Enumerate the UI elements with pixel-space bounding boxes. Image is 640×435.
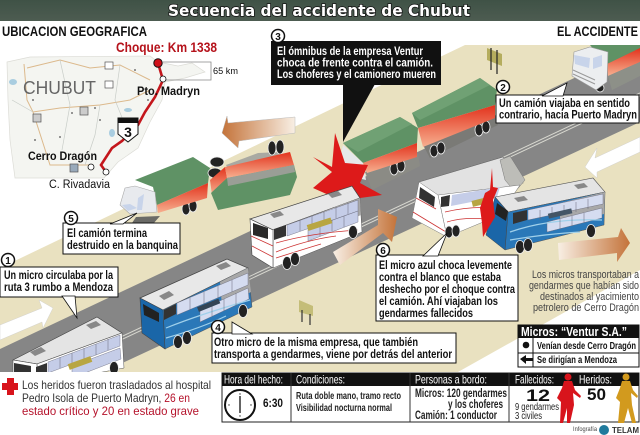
road sign upper (487, 48, 502, 74)
arrow: white left (0, 300, 53, 340)
icon: gold figure (616, 374, 638, 423)
text block: heridos: estado crítico y 20 en estado grave (22, 404, 199, 418)
callout 4: second bus: Otro micro de la misma empresa, que también (214, 337, 418, 349)
data table: Personas a bordo: (415, 372, 487, 386)
data table: Condiciones: (296, 372, 345, 386)
map label: choque: Choque: Km 1338 (116, 39, 217, 55)
map label: Cerro Dragón: Cerro Dragón (28, 151, 97, 163)
65 km bracket: 65 km (213, 66, 238, 77)
text block: heridos: Los heridos fueron trasladados al hospital (22, 378, 211, 392)
crash star between buses (480, 168, 498, 237)
scene background: beige ground (0, 45, 640, 372)
blue bus lower (140, 259, 252, 349)
white bus centre (250, 186, 362, 270)
arrow: white top right (585, 137, 640, 178)
city marker: Cerro Dragón (88, 164, 94, 170)
crash marker (154, 59, 162, 67)
callout 3: head-on collision: El ómnibus de la empresa Ventur (277, 46, 423, 58)
callout 5: destroyed truck: El camión termina (67, 228, 147, 240)
route 3 shield (118, 118, 138, 142)
credit: Infografía Telam: Infografía (573, 426, 597, 433)
data table: 6:30 (263, 398, 283, 410)
white bus crashed (412, 156, 525, 238)
arrow: right orange (558, 228, 630, 262)
callout 5: destroyed truck: 5 (68, 214, 74, 225)
collision star (313, 133, 382, 200)
city marker: Puerto Madryn (160, 76, 166, 82)
callout 1: first bus (0, 254, 118, 318)
data table: 12 (526, 386, 550, 405)
white bus lower left (13, 317, 124, 380)
text block: heridos (22, 378, 211, 418)
map label: C. Rivadavia: C. Rivadavia (49, 179, 111, 191)
truck destroyed on the shoulder (120, 157, 210, 224)
icon: clock (225, 390, 255, 420)
callout 6: blue bus collision: deshecho por el choque contra (379, 284, 515, 296)
credit: Infografía Telam (573, 425, 639, 435)
heading: ubicacion geografica: UBICACION GEOGRAFICA (2, 23, 147, 39)
credit: Infografía Telam: TELAM (612, 426, 639, 435)
lower white band (0, 372, 640, 435)
callout 3: head-on collision: choca de frente contra el camión. (277, 58, 433, 70)
data table: 50 (587, 385, 606, 404)
city marker: Comodoro Rivadavia (103, 169, 109, 175)
title bar: Secuencia del accidente de Chubut (168, 1, 470, 20)
truck in collision: trailers and cab (340, 78, 498, 190)
data table: 9 gendarmes (515, 402, 559, 413)
text block: heridos: Pedro Isola de Puerto Madryn, 26 en (22, 391, 190, 405)
callout 3: head-on collision: 3 (275, 32, 281, 43)
callout 4: second bus: transporta a gendarmes, viene por detrás del anterior (214, 349, 452, 361)
callout 6: blue bus collision: gendarmes fallecidos (379, 308, 473, 320)
data table: Micros: 120 gendarmes (415, 386, 507, 400)
callout 3: head-on collision: Los choferes y el camionero mueren (277, 69, 436, 81)
callout 1: first bus: Un micro circulaba por la (4, 270, 113, 282)
map: Chubut province (7, 56, 205, 178)
data table: y los choferes (448, 397, 503, 411)
callout 3: head-on collision (271, 30, 441, 142)
map label: Puerto Madryn: Pto. Madryn (137, 86, 200, 98)
road centre line (110, 93, 640, 345)
data table: 3 civiles (515, 411, 542, 422)
data table: Visibilidad nocturna normal (296, 402, 392, 414)
data table: Fallecidos: (515, 372, 554, 386)
callout 1: first bus: ruta 3 rumbo a Mendoza (4, 282, 113, 294)
callout 6: blue bus collision: El micro azul choca levemente (379, 260, 512, 272)
icon: red cross (2, 378, 18, 395)
callout 5: destroyed truck (63, 212, 180, 254)
callout 6: blue bus collision: el camión. Ahí viajaban los (379, 296, 498, 308)
callout 6: blue bus collision: 6 (380, 246, 386, 257)
icon: red figure (557, 374, 581, 423)
data table: Ruta doble mano, tramo recto (296, 390, 401, 402)
road (0, 47, 640, 372)
callout 1: first bus: 1 (5, 256, 11, 267)
map label: CHUBUT: CHUBUT (23, 78, 96, 98)
arrow: truck direction (222, 116, 295, 148)
text block: los micros (529, 269, 640, 314)
callout 4: second bus (212, 320, 456, 363)
callout 6: blue bus collision (376, 233, 518, 321)
route 3 red line (101, 63, 163, 172)
data table (222, 372, 639, 422)
callout 6: blue bus collision: contra el blanco que estaba (379, 272, 501, 284)
data table: Camión: 1 conductor (415, 408, 497, 422)
data table: Heridos: (579, 372, 612, 386)
callout 2: truck direction: 2 (500, 83, 506, 94)
title bar: Secuencia del accidente de Chubut (168, 1, 470, 20)
truck far right (572, 45, 640, 92)
callout 5: destroyed truck: destruido en la banquina (67, 240, 178, 252)
data table: Hora del hecho: (224, 372, 283, 386)
callout 2: truck direction (496, 80, 639, 123)
blue bus right (486, 178, 605, 254)
legend: micros Ventur (518, 324, 639, 367)
road sign lower (299, 300, 313, 325)
title bar (0, 0, 640, 21)
callout 4: second bus: 4 (215, 323, 221, 334)
65 km bracket (163, 62, 238, 80)
overturned trailer (208, 140, 297, 210)
arrow: road orange (333, 209, 397, 265)
route 3 shield: 3 (124, 124, 132, 140)
